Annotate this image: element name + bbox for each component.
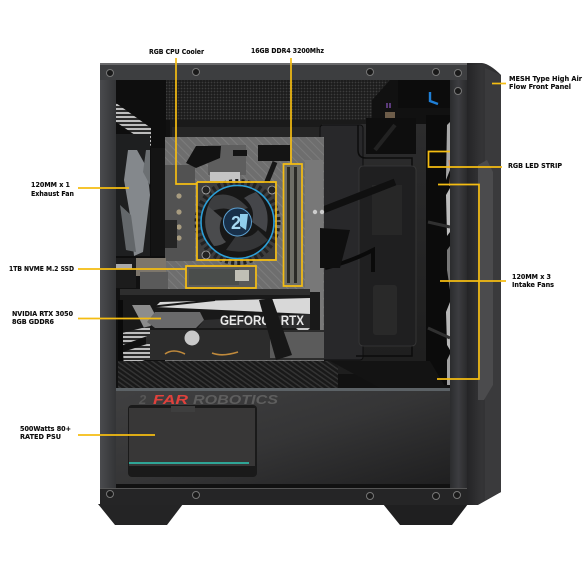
case interior — [100, 64, 467, 504]
callout: graphics card: NVIDIA RTX 3050 — [12, 310, 73, 318]
lower board and bracket — [118, 300, 324, 368]
callout: PSU: 500Watts 80+ — [20, 425, 71, 433]
front mesh panel — [462, 63, 501, 505]
GPU brand text: GEFORCE RTX — [220, 313, 304, 328]
CPU cooler — [197, 182, 278, 262]
PSU window — [128, 405, 257, 477]
callout: front panel: Flow Front Panel — [509, 83, 571, 91]
M.2 SSD — [187, 267, 255, 287]
brand logo — [138, 392, 278, 407]
callout: PSU: RATED PSU — [20, 433, 61, 441]
callout: RGB LED strip — [428, 152, 562, 170]
callout: exhaust fan: Exhaust Fan — [31, 190, 74, 198]
exhaust fan and heatsink — [116, 80, 167, 270]
rear chassis backplate — [318, 78, 450, 374]
RAM modules — [284, 165, 301, 285]
callout: graphics card — [12, 310, 161, 326]
power connectors — [186, 145, 350, 268]
right intake fans — [426, 115, 451, 385]
case feet — [98, 504, 468, 525]
motherboard — [116, 137, 324, 363]
brand logo: FAR — [153, 392, 189, 407]
PSU shroud floor vent — [118, 361, 338, 388]
callout: SSD: 1TB NVME M.2 SSD — [9, 265, 74, 273]
callout: RGB LED strip: RGB LED STRIP — [508, 162, 562, 170]
case frame — [100, 63, 467, 505]
CPU cooler: 2 — [231, 213, 241, 233]
callout: front panel: MESH Type High Air — [509, 75, 583, 83]
ribbon cable — [259, 298, 292, 360]
callout: front panel — [492, 75, 583, 91]
callout: intake fans: Intake Fans — [512, 281, 554, 289]
callout: intake fans — [437, 184, 554, 379]
callout: intake fans: 120MM x 3 — [512, 273, 551, 281]
top mesh vent — [148, 80, 390, 137]
callout: RAM — [251, 47, 324, 286]
callout: exhaust fan — [31, 181, 129, 198]
callout: PSU — [20, 425, 155, 441]
callout: RGB CPU Cooler — [149, 48, 276, 260]
callout: RGB CPU Cooler: RGB CPU Cooler — [149, 48, 205, 56]
callout: RAM: 16GB DDR4 3200Mhz — [251, 47, 324, 55]
graphics card — [120, 289, 320, 338]
brand logo: ROBOTICS — [193, 392, 278, 407]
floor right — [330, 361, 446, 388]
PSU shroud — [116, 388, 450, 488]
callout: exhaust fan: 120MM x 1 — [31, 181, 70, 189]
brand logo: 2 — [138, 392, 147, 407]
callout: graphics card: 8GB GDDR6 — [12, 318, 54, 326]
callout: SSD — [9, 265, 256, 288]
